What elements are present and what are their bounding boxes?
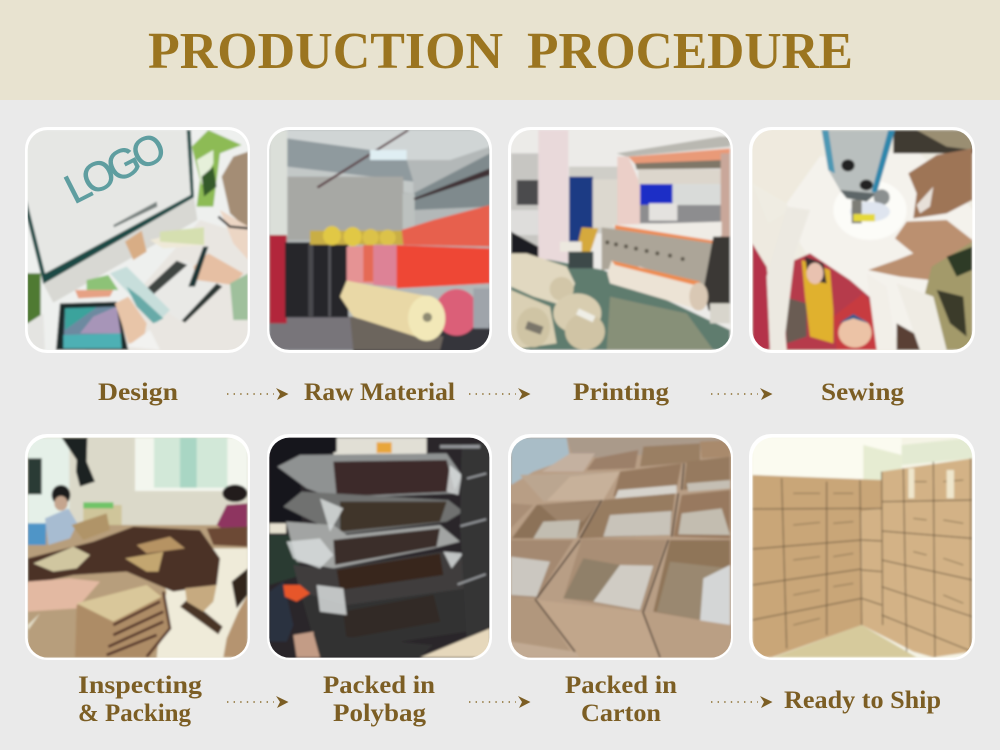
label: Packed in Carton: Carton — [581, 700, 661, 727]
label: Raw Material: Raw Material — [304, 379, 455, 406]
label: Packed in Polybag: Polybag — [333, 700, 427, 727]
header band — [0, 0, 1000, 100]
label: Printing: Printing — [573, 379, 670, 406]
photo panel: printing — [508, 127, 735, 353]
title — [148, 23, 853, 80]
arrow: printing to sewing — [711, 388, 772, 400]
photo panel: sewing — [749, 127, 977, 353]
arrow: carton to ready to ship — [711, 696, 772, 708]
photo panel: packed in polybag — [267, 434, 493, 662]
photo panel: ready to ship — [749, 434, 977, 662]
label: Inspecting & Packing: Inspecting — [78, 672, 203, 699]
photo panel: raw material — [267, 127, 493, 353]
arrow: polybag to carton — [469, 696, 530, 708]
label: Design: Design — [98, 379, 178, 406]
photo panel: inspecting and packing — [25, 434, 252, 662]
logo lettering on monitor: LOGO — [57, 123, 173, 213]
label: Packed in Carton — [565, 672, 677, 727]
arrow: raw material to printing — [469, 388, 530, 400]
label: Packed in Polybag — [323, 672, 435, 727]
label: Packed in Carton: Packed in — [565, 672, 677, 699]
photo panel: packed in carton — [508, 434, 735, 662]
photo panel: design — [23, 123, 253, 353]
label: Sewing: Sewing — [821, 379, 905, 406]
title: PROCEDURE — [527, 23, 853, 80]
arrow: packing to polybag — [227, 696, 288, 708]
label: Packed in Polybag: Packed in — [323, 672, 435, 699]
arrow: design to raw material — [227, 388, 288, 400]
label: Ready to Ship: Ready to Ship — [784, 687, 941, 714]
label: Inspecting & Packing — [78, 672, 203, 727]
label: Inspecting & Packing: & Packing — [78, 700, 191, 727]
title: PRODUCTION — [148, 23, 503, 80]
